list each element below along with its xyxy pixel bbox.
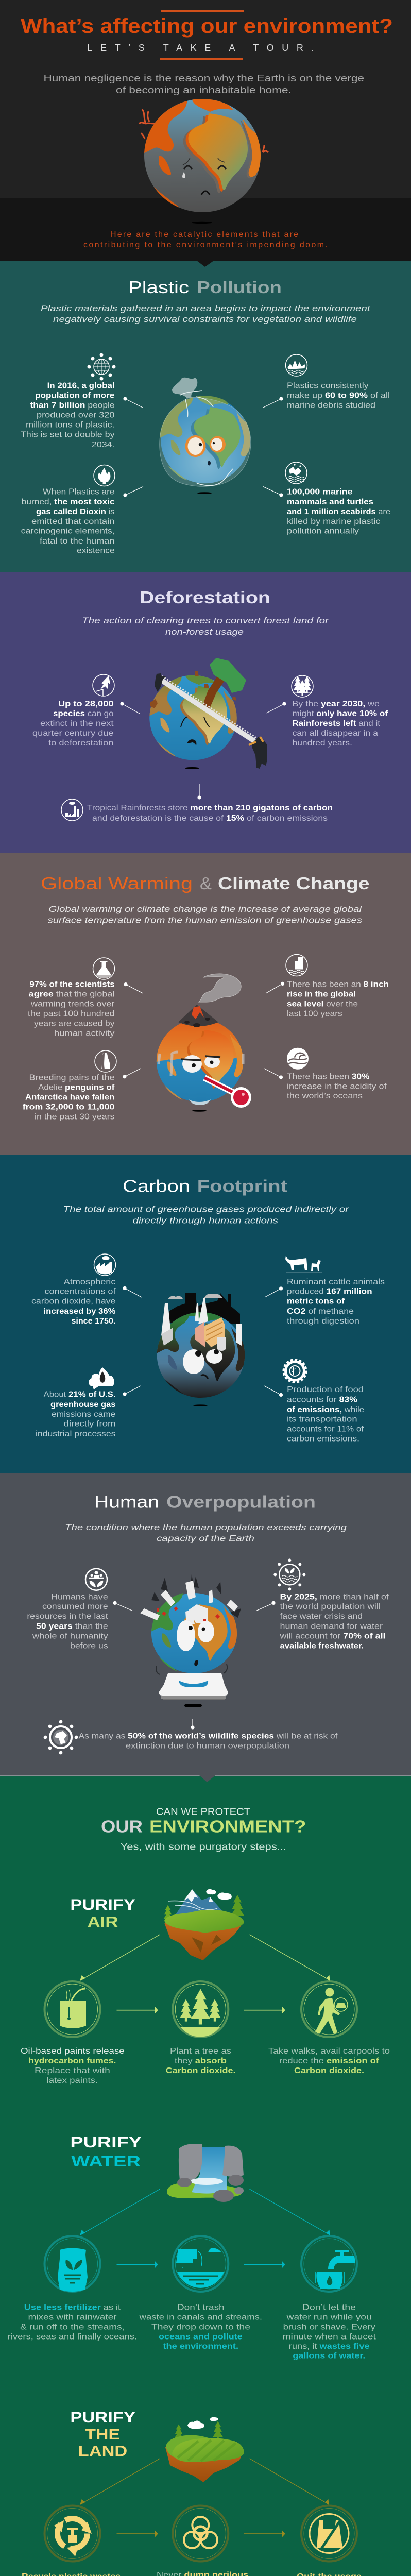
description: negatively causing survival constraints for vegetation and wildlife — [53, 314, 357, 324]
stat: penguins — [23, 1073, 115, 1122]
icon: buildings and sea — [286, 954, 307, 976]
stat: atmospheric carbon: increased by 36% — [43, 1307, 115, 1316]
description: Plastic materials gathered in an area begins to impact the environment — [41, 303, 371, 313]
stat: species extinction: to deforestation — [48, 739, 113, 748]
stat: plastic production: 2034. — [92, 440, 114, 449]
description — [48, 904, 363, 925]
stat: dioxin: When Plastics are — [43, 488, 115, 497]
heading: purify water — [70, 2134, 142, 2170]
text: air tips: Carbon dioxide. — [166, 2066, 236, 2075]
stat: dioxin: gas called Dioxin is — [36, 507, 115, 516]
text: water tips: They drop down to the — [151, 2323, 250, 2331]
intro text: Human negligence is the reason why the Earth is on the verge — [43, 73, 364, 83]
heading: human overpopulation: Overpopulation — [166, 1492, 316, 1511]
stat: food production — [287, 1385, 364, 1443]
heading: deforestation: Deforestation — [140, 588, 270, 607]
stat: scientists agree: the past 100 hundred — [28, 1010, 114, 1019]
stat: sea level rise: rise in the global — [287, 990, 356, 999]
text: water tips: water run while you — [286, 2313, 372, 2322]
icon: running faucet — [301, 2236, 357, 2292]
heading: global warming and climate change — [41, 874, 370, 893]
icon: people and leaf — [85, 1569, 107, 1590]
icon: trees — [173, 1981, 228, 2037]
heading: carbon footprint — [123, 1177, 287, 1196]
text: water tips: minute when a faucet — [283, 2333, 376, 2341]
heading: carbon footprint: Carbon — [123, 1177, 190, 1196]
text: land tips — [22, 2571, 383, 2576]
icon: wildlife globe — [44, 1720, 78, 1754]
illustration: factory earth — [150, 1293, 248, 1406]
illustration: overpopulated earth on scale — [140, 1574, 241, 1707]
stat: resources consumed: resources in the last — [27, 1612, 108, 1621]
stat: us greenhouse gas: About 21% of U.S. — [43, 1390, 115, 1399]
icon: falling tree — [93, 674, 114, 696]
stat: water crisis: will account for 70% of all — [279, 1632, 385, 1640]
stat: ocean acidity: the world’s oceans — [287, 1092, 363, 1100]
stat: dioxin — [21, 488, 115, 555]
text: water tips: Use less fertilizer as it — [24, 2303, 121, 2312]
stat: dioxin: emitted that contain — [31, 517, 114, 526]
intro text: of becoming an inhabitable home. — [116, 84, 292, 95]
panel: plastic pollution — [0, 261, 411, 572]
stat: resources consumed: Humans have — [51, 1592, 108, 1601]
stat: carbon stored: and deforestation is the cause of 15% of carbon emissions — [92, 814, 328, 823]
stat: resources consumed: whole of humanity — [32, 1632, 108, 1640]
icon: population globe — [88, 353, 115, 380]
stat: marine deaths: 100,000 marine — [287, 488, 353, 497]
stat: marine deaths: pollution annually — [287, 527, 359, 536]
stat: species extinction: extinct in the next — [40, 719, 114, 728]
text: air tips: Plant a tree as — [170, 2047, 231, 2056]
illustration: earth being sawn — [143, 658, 267, 769]
heading: plastic pollution: Plastic — [128, 278, 189, 297]
stat: scientists agree: human activity — [54, 1029, 114, 1038]
illustration: floating farmland island — [165, 2417, 244, 2482]
icon: walking person — [301, 1981, 357, 2037]
illustration: crying burnt earth — [135, 91, 268, 224]
stat: penguins: Breeding pairs of the — [29, 1073, 115, 1082]
icon: food gear — [283, 1360, 306, 1382]
stat: plastic production: This is set to double by — [21, 431, 114, 439]
stat: plastic production: population of more — [35, 392, 114, 400]
panel: deforestation — [0, 572, 411, 853]
stat: cattle methane: CO2 of methane — [287, 1307, 354, 1316]
panel: carbon footprint — [0, 1155, 411, 1473]
stat: dioxin: existence — [77, 547, 115, 555]
text: air tips: they absorb — [175, 2057, 227, 2065]
heading: global warming and climate change: Climate Change — [218, 874, 370, 893]
stat: penguins: Adelie penguins of — [38, 1083, 115, 1092]
heading: purify air — [70, 1896, 135, 1931]
callout: catalytic elements: contributing to the environment’s impending doom. — [83, 241, 328, 249]
description — [63, 1205, 350, 1225]
callout: catalytic elements: Here are the catalytic elements that are — [110, 230, 298, 239]
stat: rainforests left: By the year 2030, we — [293, 700, 380, 708]
icon: burning plastic — [94, 465, 115, 486]
text: water tips: mixes with rainwater — [28, 2313, 117, 2322]
heading: can we protect our environment: Yes, with some purgatory steps... — [121, 1842, 286, 1852]
description: The action of clearing trees to convert forest land for — [82, 616, 330, 625]
stat: scientists agree — [28, 980, 115, 1038]
stat: water crisis — [279, 1592, 389, 1650]
stat: rainforests left: might only have 10% of — [293, 709, 388, 718]
stat: marine deaths: killed by marine plastic — [287, 517, 380, 526]
text: water tips: the environment. — [163, 2342, 238, 2351]
text: air tips: reduce the emission of — [279, 2057, 380, 2065]
section: purify the land — [22, 2409, 383, 2576]
heading: purify the land: PURIFY — [70, 2409, 135, 2426]
stat: water crisis: By 2025, more than half of — [280, 1592, 389, 1601]
illustration: feverish volcano earth — [154, 974, 251, 1112]
subtitle — [88, 43, 314, 60]
stat: food production: of emissions, while — [287, 1405, 364, 1414]
arrows: air flow — [80, 1935, 330, 2013]
arrows: water flow — [80, 2189, 330, 2267]
text: air tips: hydrocarbon fumes. — [28, 2057, 116, 2065]
heading: carbon footprint: Footprint — [197, 1177, 287, 1196]
stat: water crisis: human demand for water — [280, 1622, 383, 1631]
stat: wildlife extinction: extinction due to human overpopulation — [126, 1742, 289, 1751]
stat: ocean acidity — [287, 1072, 387, 1100]
stat: plastic production: In 2016, a global — [47, 381, 115, 391]
heading: can we protect our environment: OUR — [101, 1817, 143, 1836]
stat: food production: Production of food — [287, 1385, 364, 1394]
stat: penguins: Antarctica have fallen — [25, 1093, 114, 1101]
stat: us greenhouse gas: directly from — [64, 1420, 115, 1429]
heading: purify air: AIR — [88, 1914, 118, 1931]
stat: food production: its transportation — [287, 1415, 357, 1424]
description — [41, 303, 371, 324]
description: directly through human actions — [133, 1216, 279, 1225]
stat: atmospheric carbon: concentrations of — [44, 1287, 116, 1296]
stat: ocean acidity: There has been 30% — [287, 1072, 369, 1081]
heading: plastic pollution: Pollution — [197, 278, 282, 297]
stat: marine debris — [287, 381, 390, 410]
illustration: floating mountain island — [163, 1889, 244, 1960]
icon: no plastic bags — [301, 2506, 357, 2562]
stat: plastic production: than 7 billion people — [30, 401, 115, 410]
stat: dioxin: fatal to the human — [40, 537, 114, 546]
icon: fertilizer bag — [44, 2236, 100, 2292]
heading: purify water: WATER — [71, 2153, 141, 2170]
stat: cattle methane: through digestion — [287, 1317, 359, 1326]
heading: global warming and climate change: & — [200, 874, 212, 893]
stat: atmospheric carbon: since 1750. — [71, 1317, 115, 1326]
stat: scientists agree: agree that the global — [29, 990, 114, 999]
subtitle: LET’S TAKE A TOUR. — [88, 43, 314, 53]
stat: resources consumed: consumed more — [42, 1602, 108, 1611]
description: non-forest usage — [165, 627, 244, 637]
text: water tips: Don’t let the — [302, 2303, 356, 2312]
stat: sea level rise: There has been an 8 inch — [287, 980, 389, 989]
description: surface temperature from the human emission of greenhouse gases — [48, 915, 363, 925]
stat: dioxin: carcinogenic elements, — [21, 527, 115, 536]
heading: global warming and climate change: Global Warming — [41, 874, 193, 893]
stat: ocean acidity: increase in the acidity of — [287, 1082, 387, 1091]
stat: carbon stored — [87, 804, 333, 823]
text: air tips: Replace that with — [35, 2066, 110, 2075]
heading: human overpopulation: Human — [94, 1492, 159, 1511]
stat: species extinction: species can go — [53, 709, 114, 718]
connector lines — [123, 982, 284, 1079]
icon: cattle — [285, 1256, 322, 1272]
heading: human overpopulation — [94, 1492, 316, 1511]
icon: water and plant — [273, 1558, 305, 1590]
text: water tips: oceans and pollute — [159, 2333, 243, 2341]
stat: plastic production: produced over 320 — [37, 411, 115, 420]
heading: can we protect our environment: ENVIRONMENT? — [149, 1817, 306, 1836]
panel: hero header — [0, 0, 411, 261]
stat: plastic production — [21, 381, 115, 449]
connector lines — [124, 397, 283, 497]
connector lines — [113, 1601, 275, 1729]
stat: marine deaths: mammals and turtles — [287, 498, 373, 506]
stat: water crisis: the world population will — [280, 1602, 381, 1611]
heading: can we protect our environment — [101, 1807, 306, 1852]
icon: factory — [61, 799, 83, 821]
icon: paint bucket — [44, 1981, 100, 2037]
text: water tips: gallons of water. — [293, 2351, 365, 2361]
panel: can we protect our environment — [0, 1775, 411, 2576]
section: purify air — [21, 1889, 390, 2085]
description — [65, 1522, 347, 1543]
stat: water crisis: face water crisis and — [280, 1612, 363, 1621]
text: air tips: Take walks, avail carpools to — [268, 2047, 390, 2056]
stat: scientists agree: years are caused by — [34, 1019, 114, 1028]
icon: penguin — [95, 1050, 116, 1072]
stat: cattle methane — [287, 1278, 385, 1326]
stat: sea level rise: sea level over the — [287, 999, 358, 1009]
stat: us greenhouse gas: greenhouse gas — [50, 1400, 116, 1409]
stat: marine deaths — [287, 488, 390, 536]
connector lines — [123, 1286, 282, 1396]
stat: rainforests left — [293, 700, 388, 748]
stat: us greenhouse gas — [36, 1390, 116, 1438]
text: water tips: & run off to the streams, — [20, 2323, 125, 2331]
stat: scientists agree: 97% of the scientists — [30, 980, 115, 989]
text: water tips: runs, it wastes five — [289, 2342, 370, 2351]
title: What’s affecting our environment? — [21, 15, 393, 38]
stat: atmospheric carbon: Atmospheric — [64, 1278, 115, 1286]
stat: food production: accounts for 83% — [287, 1396, 357, 1404]
stat: penguins: from 32,000 to 11,000 — [23, 1103, 115, 1112]
text: air tips: Carbon dioxide. — [294, 2066, 364, 2075]
text: water tips — [8, 2303, 376, 2361]
stat: rainforests left: can all disappear in a — [293, 729, 378, 738]
stat: water crisis: available freshwater. — [280, 1641, 364, 1650]
icon: biohazard — [173, 2506, 228, 2562]
stat: food production: accounts for 11% of — [287, 1425, 364, 1434]
panel: human overpopulation — [0, 1473, 411, 1776]
text: air tips — [21, 2047, 390, 2085]
icon: flask — [93, 958, 114, 979]
illustration: earth in plastic bag — [153, 378, 253, 494]
description: The total amount of greenhouse gases produced indirectly or — [63, 1205, 350, 1214]
stat: atmospheric carbon — [31, 1278, 116, 1326]
heading: purify the land: THE — [85, 2426, 120, 2443]
description: The condition where the human population exceeds carrying — [65, 1522, 347, 1532]
stat: us greenhouse gas: emissions came — [52, 1410, 116, 1419]
stat: cattle methane: produced 167 million — [287, 1287, 372, 1296]
heading: plastic pollution — [128, 278, 282, 297]
icon: pine trees — [292, 675, 313, 697]
stat: atmospheric carbon: carbon dioxide, have — [31, 1297, 116, 1306]
intro text — [43, 73, 364, 95]
stat: rainforests left: hundred years. — [293, 739, 352, 748]
icon: marine animals — [285, 462, 307, 484]
stat: resources consumed: 50 years than the — [36, 1622, 108, 1631]
stat: marine deaths: and 1 million seabirds are — [287, 507, 390, 516]
icon: polluted stream — [173, 2236, 228, 2292]
text: water tips: rivers, seas and finally oceans. — [8, 2333, 137, 2341]
connector lines — [121, 702, 286, 799]
stat: scientists agree: warming trends over — [30, 999, 115, 1009]
description — [82, 616, 330, 637]
stat: sea level rise — [287, 980, 389, 1019]
stat: sea level rise: last 100 years — [287, 1010, 342, 1019]
stat: species extinction — [32, 700, 114, 748]
icon: marine debris — [285, 354, 307, 376]
text: air tips: Oil-based paints release — [21, 2047, 125, 2056]
stat: cattle methane: Ruminant cattle animals — [287, 1278, 385, 1286]
arrows: land flow — [80, 2459, 329, 2537]
stat: food production: carbon emissions. — [287, 1434, 359, 1443]
stat: us greenhouse gas: industrial processes — [36, 1430, 115, 1438]
icon: emissions cloud — [89, 1367, 114, 1389]
stat: wildlife extinction: As many as 50% of the world’s wildlife species will be at risk of — [79, 1732, 338, 1741]
stat: wildlife extinction — [79, 1732, 338, 1751]
text: air tips: latex paints. — [47, 2076, 98, 2085]
stat: cattle methane: metric tons of — [287, 1297, 345, 1306]
stat: resources consumed — [27, 1592, 108, 1650]
stat: plastic production: million tons of plastic. — [26, 420, 114, 429]
text: water tips: Don’t trash — [177, 2303, 225, 2312]
stat: carbon stored: Tropical Rainforests store more than 210 gigatons of carbon — [87, 804, 333, 812]
icon: factory smoke — [94, 1254, 115, 1276]
icon: recycle — [44, 2506, 100, 2562]
stat: penguins: in the past 30 years — [35, 1113, 114, 1122]
heading: purify the land: LAND — [78, 2443, 127, 2460]
stat: rainforests left: Rainforests left and it — [293, 719, 381, 728]
stat: resources consumed: before us — [70, 1641, 108, 1650]
text: water tips: waste in canals and streams. — [139, 2313, 262, 2322]
text: water tips: brush or shave. Every — [283, 2323, 375, 2331]
stat: marine debris: marine debris studied — [287, 401, 375, 410]
heading: purify the land — [70, 2409, 135, 2460]
icon: ocean wave — [287, 1048, 309, 1070]
heading: purify water: PURIFY — [70, 2134, 142, 2151]
description: Global warming or climate change is the increase of average global — [49, 904, 362, 914]
stat: dioxin: burned, the most toxic — [22, 498, 115, 506]
illustration: waterfall — [167, 2144, 244, 2202]
stat: species extinction: Up to 28,000 — [58, 700, 114, 708]
section: purify water — [8, 2134, 376, 2361]
heading: purify air: PURIFY — [70, 1896, 135, 1913]
stat: species extinction: quarter century due — [32, 729, 114, 738]
stat: marine debris: Plastics consistently — [287, 381, 369, 391]
stat: marine debris: make up 60 to 90% of all — [287, 392, 390, 400]
heading: can we protect our environment: CAN WE PROTECT — [156, 1807, 250, 1817]
panel: global warming and climate change — [0, 853, 411, 1155]
callout: catalytic elements — [83, 230, 328, 249]
description: capacity of the Earth — [157, 1533, 254, 1543]
